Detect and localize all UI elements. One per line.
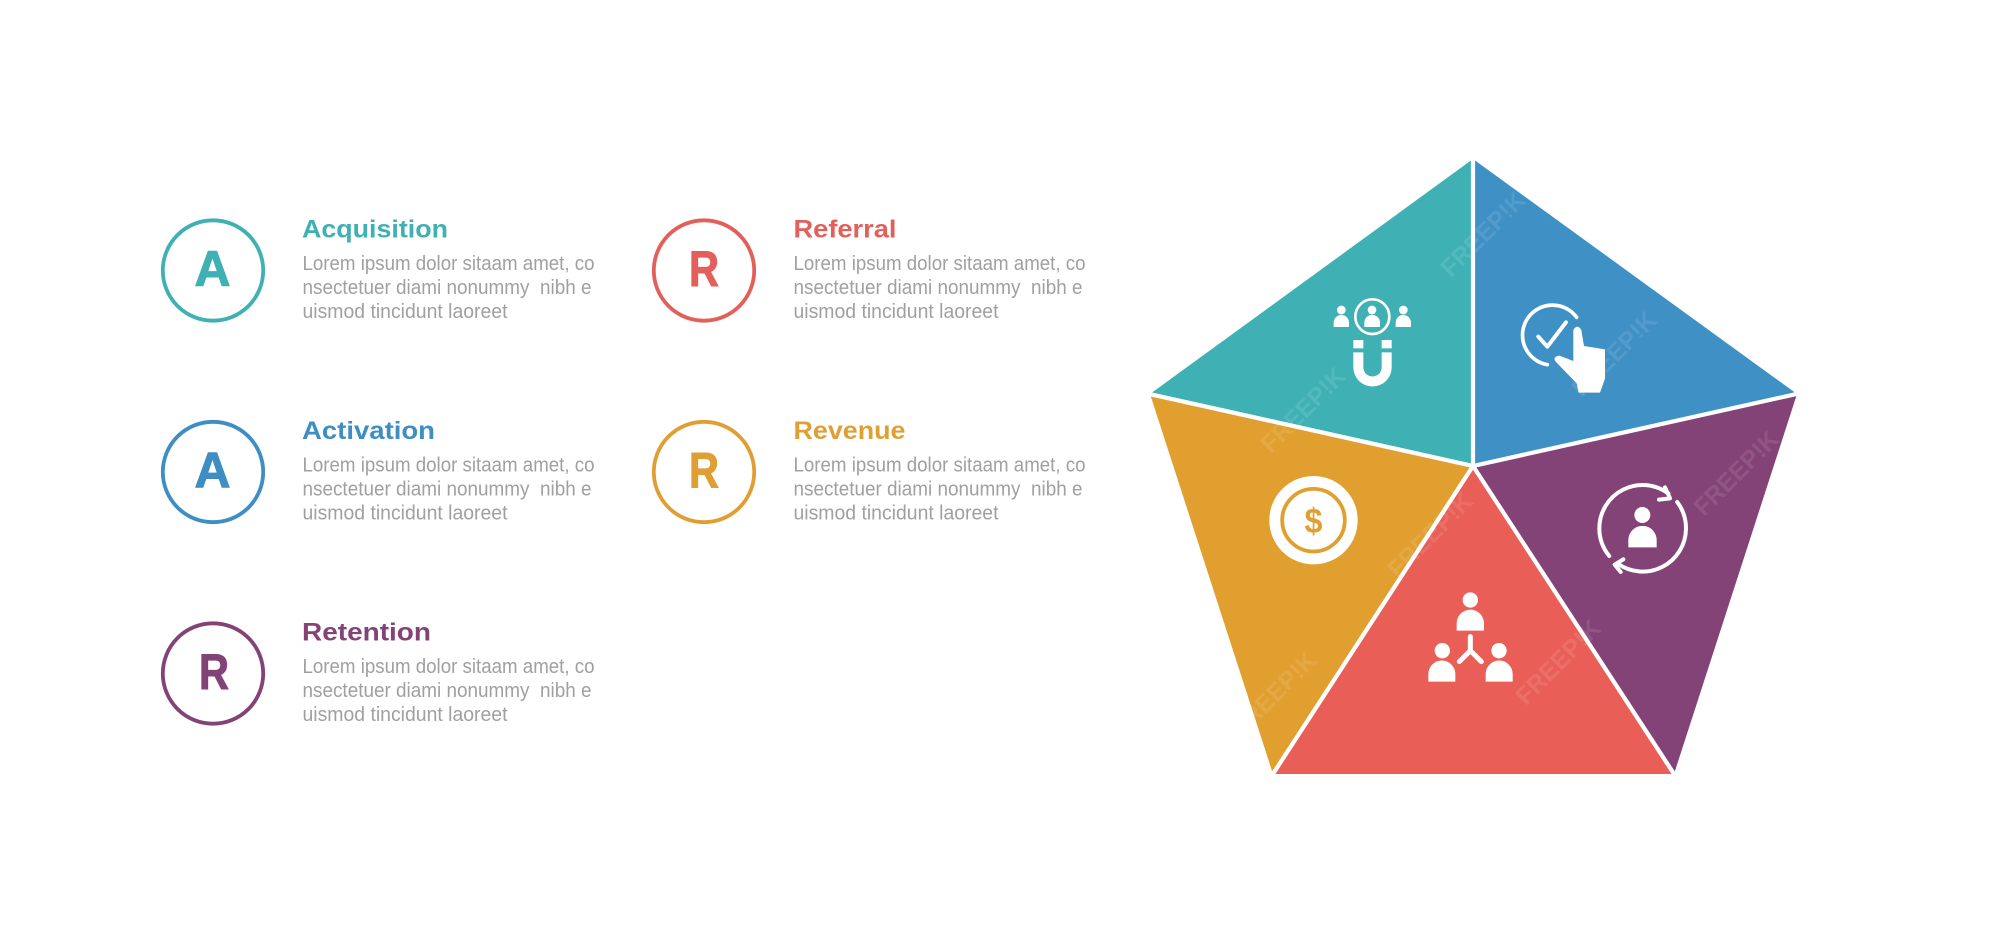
badge: R: R [199, 644, 229, 700]
heading: Retention: Retention [302, 618, 431, 646]
watermark: FREEP!K [1435, 186, 1531, 282]
watermark: FREEP!K [1510, 614, 1606, 710]
description [794, 454, 1086, 524]
description: nsectetuer diami nonummy nibh e [302, 478, 592, 500]
watermark [1226, 186, 1784, 742]
description: uismod tincidunt laoreet [794, 300, 999, 323]
badge: R: R [689, 442, 719, 498]
badge: A [163, 220, 263, 321]
icon: people magnet [1334, 299, 1411, 386]
badge: R [654, 422, 754, 522]
segment: acquisition [1150, 159, 1473, 466]
description [302, 655, 594, 726]
icon: dollar coin: $ [1304, 502, 1322, 541]
item: Referral [654, 216, 1086, 323]
description: Lorem ipsum dolor sitaam amet, co [302, 454, 594, 476]
description: uismod tincidunt laoreet [302, 300, 508, 323]
description: uismod tincidunt laoreet [302, 703, 508, 726]
description: uismod tincidunt laoreet [302, 502, 508, 524]
watermark: FREEP!K [1226, 646, 1322, 742]
badge: A: A [194, 442, 230, 498]
segment: referral [1273, 466, 1674, 774]
badge: R: R [689, 241, 719, 297]
heading: Referral: Referral [794, 216, 896, 244]
segment: revenue [1150, 394, 1473, 774]
pentagon chart [1145, 155, 1801, 777]
item: Revenue [654, 417, 1086, 524]
icon: referral network [1428, 592, 1513, 682]
item: Retention [163, 618, 595, 726]
description: Lorem ipsum dolor sitaam amet, co [794, 252, 1086, 275]
item: Activation [163, 417, 595, 524]
description: Lorem ipsum dolor sitaam amet, co [302, 252, 594, 275]
item: Acquisition [163, 216, 595, 323]
watermark: FREEP!K [1255, 362, 1351, 458]
badge: A [163, 422, 263, 522]
badge: R [163, 623, 263, 724]
description: Lorem ipsum dolor sitaam amet, co [302, 655, 594, 678]
description: nsectetuer diami nonummy nibh e [794, 478, 1082, 500]
description: nsectetuer diami nonummy nibh e [302, 679, 592, 702]
segment: retention [1473, 394, 1797, 774]
description [302, 454, 594, 524]
segment: activation [1473, 159, 1797, 466]
icon: retention cycle [1599, 485, 1686, 572]
description [302, 252, 594, 323]
description: uismod tincidunt laoreet [794, 502, 999, 524]
badge: A: A [194, 241, 230, 297]
badge: R [654, 220, 754, 321]
watermark: FREEP!K [1566, 306, 1662, 402]
icon: click check [1523, 305, 1605, 393]
description [794, 252, 1086, 323]
heading: Acquisition: Acquisition [302, 216, 448, 244]
description: nsectetuer diami nonummy nibh e [794, 276, 1082, 299]
watermark: FREEP!K [1688, 425, 1784, 521]
heading: Activation: Activation [302, 417, 435, 445]
heading: Revenue: Revenue [794, 417, 906, 445]
description: Lorem ipsum dolor sitaam amet, co [794, 454, 1086, 476]
description: nsectetuer diami nonummy nibh e [302, 276, 592, 299]
watermark: FREEP!K [1382, 487, 1478, 583]
icon: dollar coin [1269, 476, 1358, 564]
